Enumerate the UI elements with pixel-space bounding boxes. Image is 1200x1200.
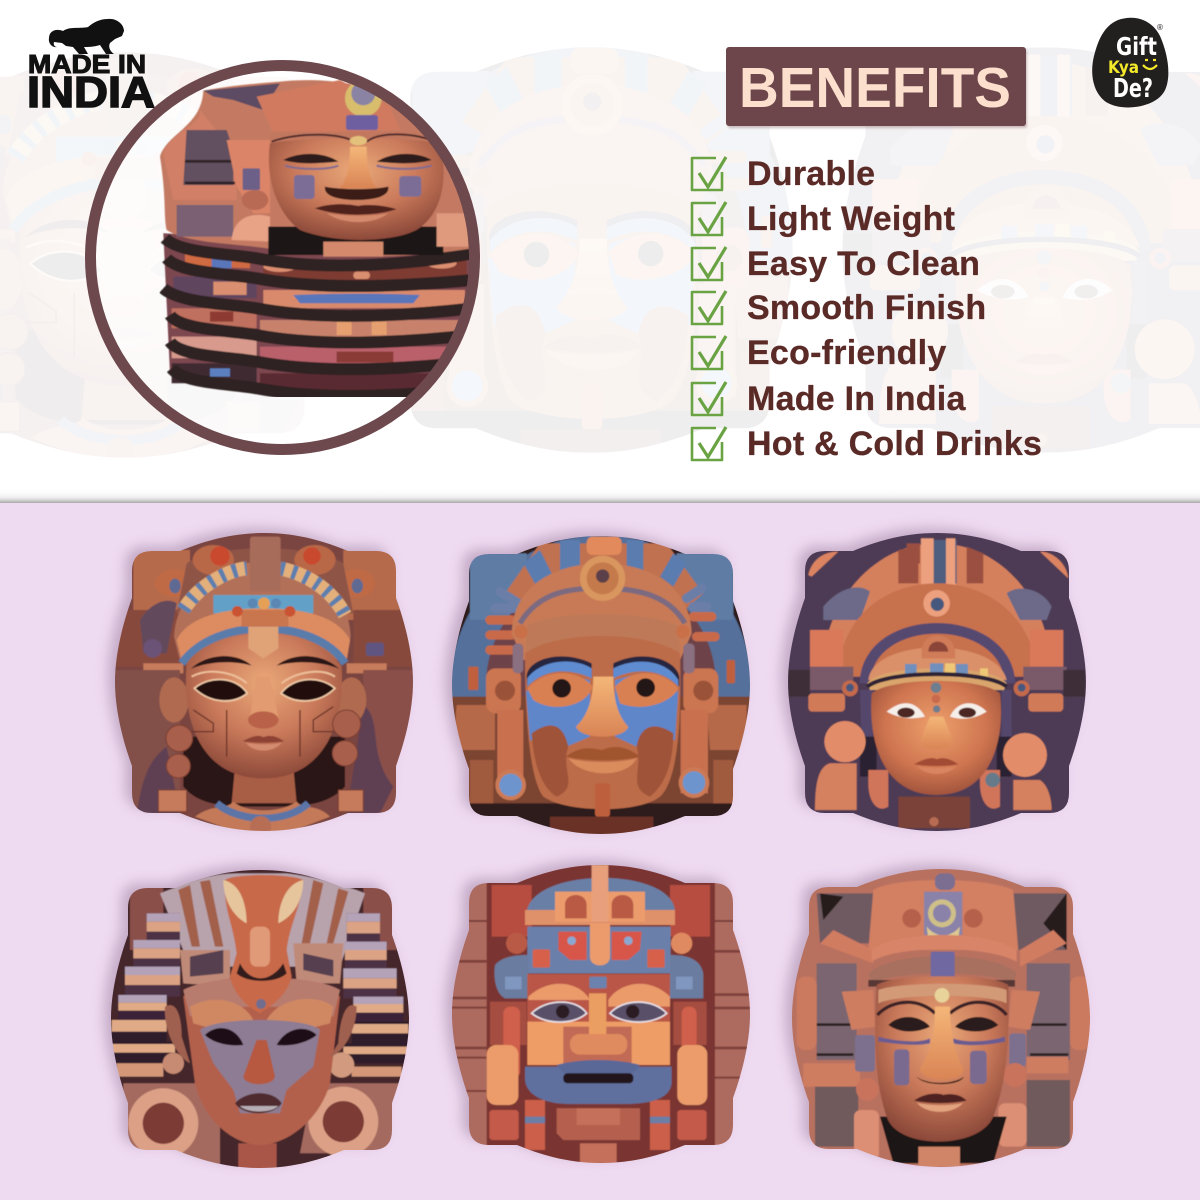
ears and dark neck xyxy=(159,677,366,837)
left stripe steps xyxy=(112,913,180,1077)
coaster art xyxy=(780,850,1100,1180)
face xyxy=(525,974,672,1163)
logo smile xyxy=(1143,60,1157,69)
coaster 5: geometric totem mask xyxy=(440,850,760,1180)
ring xyxy=(90,66,474,450)
coaster art xyxy=(115,533,413,831)
coaster shadow xyxy=(445,531,743,829)
logo: made in india xyxy=(27,19,155,117)
ears xyxy=(487,1002,707,1150)
coaster shadow xyxy=(104,865,402,1163)
icon: lion xyxy=(49,19,124,54)
face xyxy=(525,636,680,837)
coaster art xyxy=(440,850,760,1180)
benefit: light weight: Light Weight xyxy=(747,200,955,238)
mouth xyxy=(315,204,397,215)
faded background masks xyxy=(0,26,1200,470)
mask xyxy=(165,977,357,1145)
cheek marks xyxy=(294,175,315,199)
blue dome xyxy=(494,865,703,998)
band xyxy=(842,628,1030,696)
lower ornaments xyxy=(815,690,1052,828)
coaster 1: goddess mask xyxy=(102,522,413,832)
stack edges xyxy=(163,238,473,396)
benefit: hot and cold drinks: Hot & Cold Drinks xyxy=(747,425,1042,463)
temple ornaments xyxy=(842,990,1040,1167)
benefit: eco-friendly: Eco-friendly xyxy=(747,334,946,372)
coaster shadow xyxy=(108,528,406,826)
eyes xyxy=(283,154,338,163)
headdress xyxy=(203,83,280,110)
nose xyxy=(340,147,377,188)
face xyxy=(269,132,444,240)
coaster art xyxy=(111,870,409,1168)
cobra crest xyxy=(223,875,303,1013)
coaster 3: woman with arched headdress xyxy=(780,520,1100,840)
side panels xyxy=(450,880,752,1150)
stacked coasters photo xyxy=(160,80,473,397)
head band xyxy=(512,556,695,673)
crown xyxy=(868,873,1018,987)
coaster 2: male mask with blue paint xyxy=(440,526,750,834)
made in text: MADE IN xyxy=(28,49,146,79)
lilac lower panel xyxy=(0,488,1200,1200)
logo blob xyxy=(1092,18,1168,107)
top coaster xyxy=(160,80,473,257)
face xyxy=(186,627,342,778)
coaster shadow xyxy=(781,528,1079,826)
lower textured panel xyxy=(123,1083,400,1170)
dark neck surround xyxy=(268,227,443,255)
benefit: easy to clean: Easy To Clean xyxy=(747,245,980,283)
logo text: kya: Kya xyxy=(1108,58,1139,78)
coaster 4: pharaoh mask xyxy=(98,860,409,1168)
logo: gift kya de xyxy=(1092,18,1168,107)
heading box xyxy=(726,47,1026,126)
ring inner fill xyxy=(90,66,474,450)
headdress rays xyxy=(505,543,703,620)
coaster shadow xyxy=(785,864,1083,1162)
coaster art xyxy=(788,533,1086,831)
benefit: made in india: Made In India xyxy=(747,380,966,418)
fan xyxy=(788,538,1085,712)
striped headcloth xyxy=(112,873,408,1078)
face xyxy=(871,681,1001,795)
logo text: de: De? xyxy=(1113,74,1153,104)
headdress band xyxy=(174,537,351,663)
benefits heading xyxy=(726,47,1027,128)
side blocks xyxy=(797,893,1090,1147)
benefits list xyxy=(692,155,1042,463)
coaster 6: male mask with crown xyxy=(780,850,1100,1180)
ear ornaments xyxy=(456,660,747,803)
side blocks xyxy=(163,110,237,200)
coaster shadow xyxy=(445,860,743,1158)
heading box shadow xyxy=(728,50,1027,128)
logo text: gift: Gift xyxy=(1116,32,1157,61)
india text: INDIA xyxy=(27,68,155,117)
earrings xyxy=(158,710,363,812)
benefit: durable: Durable xyxy=(747,155,875,193)
face xyxy=(875,976,1009,1142)
circle photo: coaster stack xyxy=(90,66,474,450)
heading text: BENEFITS xyxy=(739,56,1011,120)
stack side bands xyxy=(163,233,473,397)
registered mark: ® xyxy=(1157,23,1163,32)
benefit: smooth finish: Smooth Finish xyxy=(747,289,986,327)
coaster art xyxy=(452,536,750,834)
right stripe steps xyxy=(343,913,408,1077)
